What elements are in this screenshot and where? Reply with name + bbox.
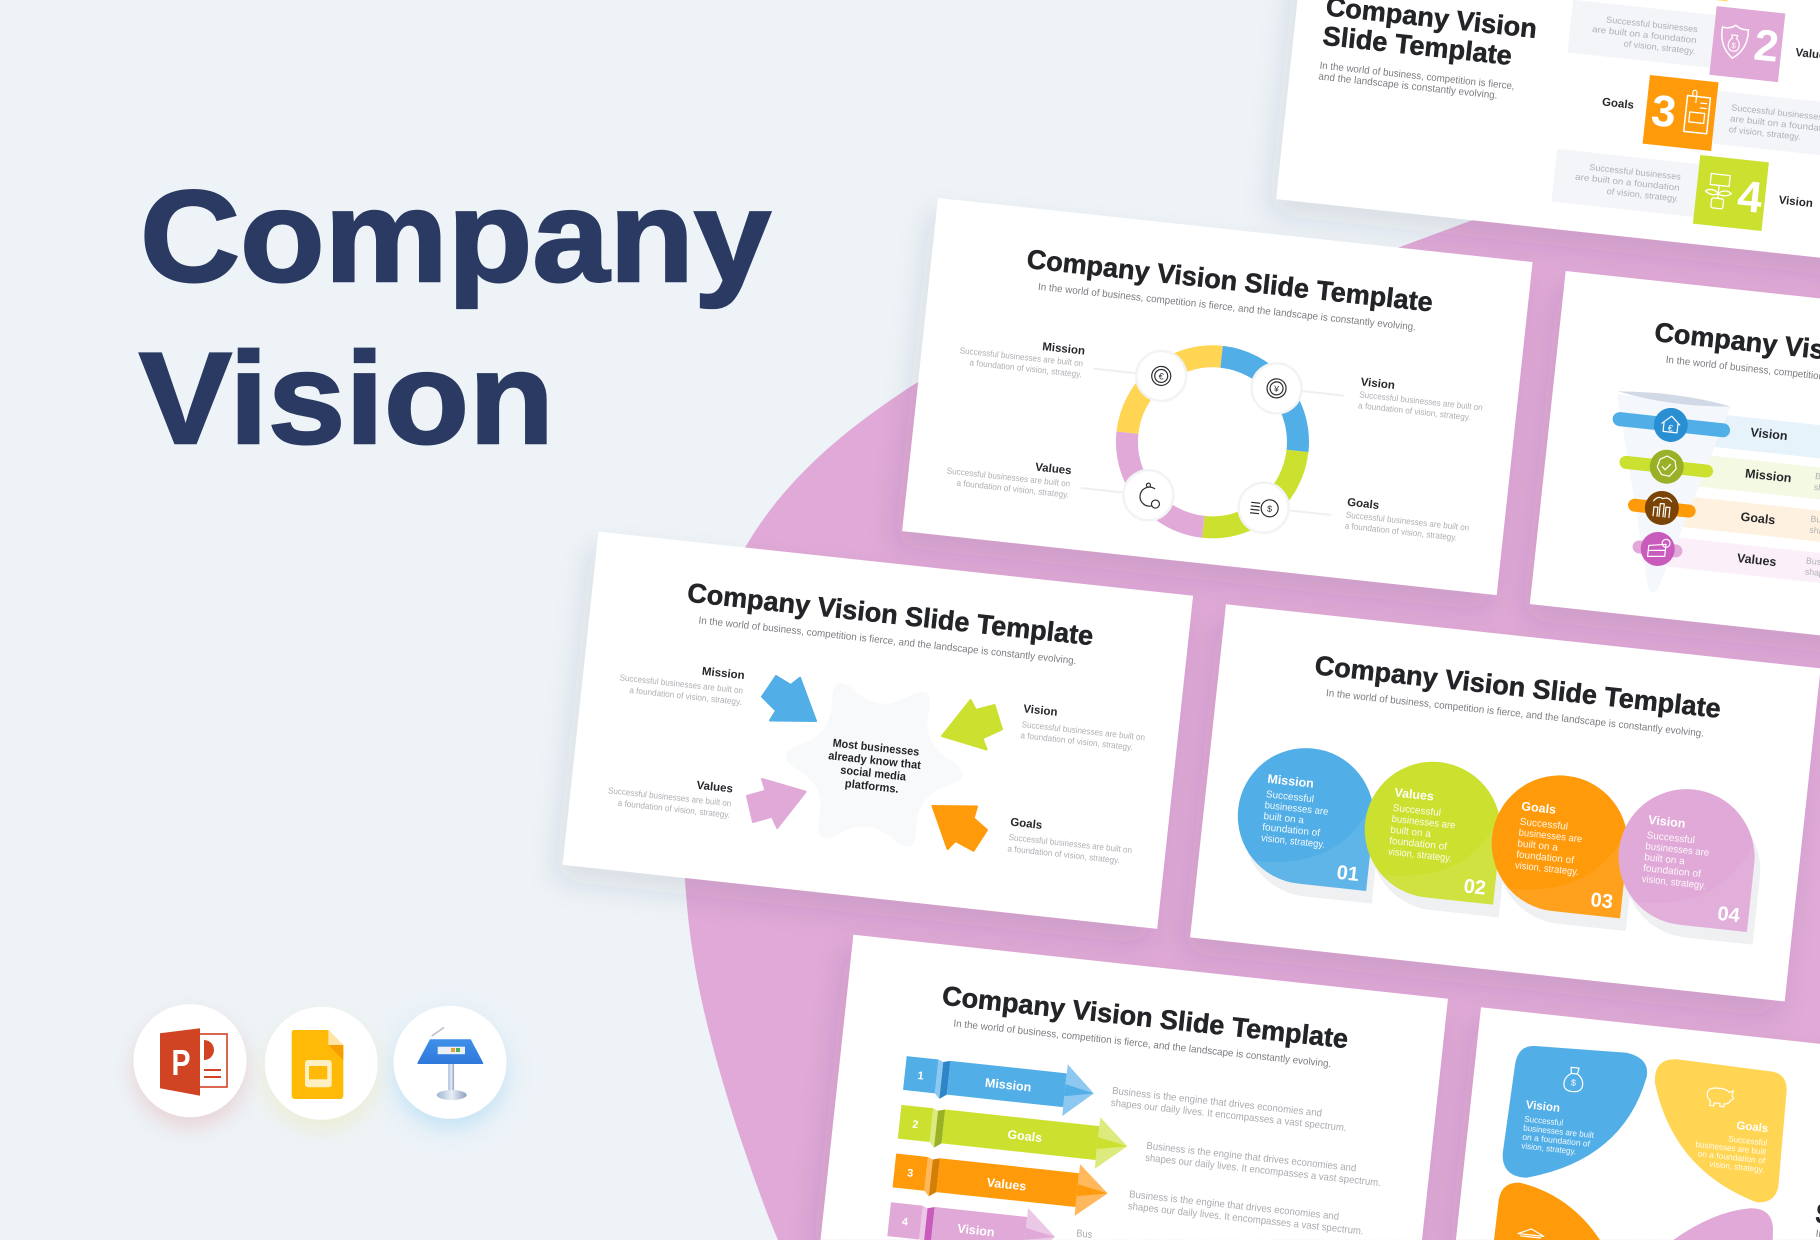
icon: temple xyxy=(1518,1228,1544,1238)
row 2: values: 2 xyxy=(1752,21,1781,72)
icon node: yen xyxy=(1249,361,1304,416)
label: goals xyxy=(1007,817,1134,867)
label: values xyxy=(606,770,734,820)
label: mission: a foundation of vision, strategy. xyxy=(969,357,1082,379)
band: goals xyxy=(1626,487,1697,529)
drop 01 mission: foundation of xyxy=(1262,822,1321,839)
label: mission: Successful businesses are built on xyxy=(959,345,1084,368)
icon node: yen: ¥ xyxy=(1272,384,1281,394)
drop 03 goals: vision, strategy. xyxy=(1514,860,1579,878)
arrow 3 values: Values xyxy=(986,1175,1027,1194)
icon node: euro: € xyxy=(1158,371,1164,382)
arrow 3 description: Business is the engine that drives economies and xyxy=(1129,1189,1340,1223)
quadrant: orange xyxy=(1494,1183,1600,1240)
label: vision xyxy=(1358,376,1485,423)
arrow 2 description: shapes our daily lives. It encompasses a vast spectrum. xyxy=(1145,1153,1381,1189)
label: goals: Goals xyxy=(1010,817,1043,832)
row 2: values: of vision, strategy. xyxy=(1623,38,1696,56)
title: Company xyxy=(140,163,771,309)
arrow 2 goals: 2 xyxy=(912,1119,919,1131)
label: values: Values xyxy=(1736,551,1777,569)
star text xyxy=(825,737,923,798)
row 4: vision: Vision xyxy=(1778,194,1813,210)
label: mission: Mission xyxy=(1744,466,1792,485)
arrow 4 vision: 4 xyxy=(901,1216,909,1229)
label: mission xyxy=(958,332,1086,379)
label: goals: a foundation of vision, strategy. xyxy=(1344,520,1458,543)
star text: Most businesses xyxy=(832,738,920,759)
arrow 1 description xyxy=(1110,1086,1348,1134)
ring chart xyxy=(1118,348,1307,536)
arrow 2 description: Business is the engine that drives economies and xyxy=(1146,1141,1357,1174)
drop 02 values: Values xyxy=(1394,785,1435,804)
subtitle: In the world of business, competition is fierce, and the landscape is constantly evolving. xyxy=(698,615,1077,667)
heading: Company Vision Slide Template xyxy=(686,578,1095,651)
row 2: values xyxy=(1567,0,1820,88)
drop 03 goals: Goals xyxy=(1521,799,1557,817)
drop 03 goals: built on a xyxy=(1517,838,1559,854)
drop 04 vision: 04 xyxy=(1716,903,1742,927)
label: mission xyxy=(618,657,745,707)
goals text: on a foundation of xyxy=(1697,1148,1766,1166)
band: values xyxy=(1631,529,1684,569)
drop 01 mission: Successful xyxy=(1265,789,1315,805)
row 3: goals: Successful businesses xyxy=(1731,102,1820,122)
vision text: on a foundation of xyxy=(1522,1132,1591,1149)
label: vision: a foundation of vision, strategy. xyxy=(1358,400,1471,422)
heading: Slide Template xyxy=(1321,21,1513,71)
drop 02 values xyxy=(1357,755,1515,917)
drop 04 vision xyxy=(1610,782,1768,945)
icon: money bag xyxy=(1563,1067,1584,1093)
drop 02 values: vision, strategy. xyxy=(1387,847,1452,864)
drop 03 goals: foundation of xyxy=(1516,849,1575,867)
row 2: values: $ xyxy=(1731,41,1737,50)
arrow 1 mission: Mission xyxy=(984,1076,1032,1095)
vision text: Successful xyxy=(1524,1114,1564,1128)
arrow 1 description: shapes our daily lives. It encompasses a vast spectrum. xyxy=(1110,1098,1347,1134)
row 4: vision: are built on a foundation xyxy=(1575,172,1680,193)
goals text xyxy=(1693,1116,1770,1175)
label: values xyxy=(945,452,1072,500)
label: values: Successful businesses are built on xyxy=(946,466,1071,489)
goals text: Successful xyxy=(1728,1134,1768,1148)
heading: Company Vision Slide Template xyxy=(941,981,1350,1054)
heading: Company Vision Slide Template xyxy=(1025,244,1434,318)
drop 02 values: foundation of xyxy=(1389,836,1448,853)
label: mission: Mission xyxy=(701,666,745,682)
slide: ring diagram xyxy=(902,198,1533,595)
ribbons xyxy=(1655,409,1820,616)
drop 01 mission: businesses are xyxy=(1264,800,1329,818)
arrow: pink xyxy=(747,779,806,828)
label: values: Values xyxy=(696,780,733,796)
arrow 3 description: shapes our daily lives. It encompasses a vast spectrum. xyxy=(1127,1201,1364,1238)
drop 01 mission: vision, strategy. xyxy=(1261,833,1325,851)
label: values: a foundation of vision, strategy. xyxy=(956,478,1069,500)
drop 03 goals: 03 xyxy=(1590,889,1614,913)
arrow 2 goals: Goals xyxy=(1007,1127,1043,1145)
label: values: a foundation of vision, strategy. xyxy=(617,798,731,820)
arrow 1 description: Business is the engine that drives economies and xyxy=(1112,1086,1323,1119)
row 4: vision: Successful businesses xyxy=(1589,162,1682,182)
arrow 1 mission xyxy=(902,1047,1097,1119)
drop 04 vision: Vision xyxy=(1648,813,1686,831)
vision text: businesses are built xyxy=(1523,1123,1595,1140)
row 3: goals: Goals xyxy=(1601,96,1634,112)
label: goals xyxy=(1740,506,1820,544)
subtitle: In the world of business, competition is fierce, and the landscape is constantly evolving. xyxy=(953,1018,1332,1070)
label: goals xyxy=(1344,497,1471,544)
drop 04 vision: built on a xyxy=(1644,852,1686,867)
drop 01 mission xyxy=(1230,741,1388,904)
icon: Keynote xyxy=(394,1006,506,1119)
row 4: vision: 4 xyxy=(1735,172,1765,223)
quadrant: pink xyxy=(1673,1208,1773,1240)
label: goals: Goals xyxy=(1740,510,1776,527)
drop 01 mission: 01 xyxy=(1336,862,1360,886)
star text: already know that xyxy=(828,750,922,772)
icon: money bag: $ xyxy=(1570,1077,1576,1088)
row 3: goals: of vision, strategy. xyxy=(1728,124,1801,142)
label: values: Successful businesses are built on xyxy=(608,785,732,808)
icon: Google Slides xyxy=(265,1007,378,1120)
label: goals: Goals xyxy=(1347,497,1380,512)
subtitle: In the world of business, competition is fierce, xyxy=(1319,60,1515,92)
label: vision: a foundation of vision, strategy. xyxy=(1020,730,1133,752)
goals text: vision, strategy. xyxy=(1709,1159,1765,1175)
drop 04 vision: Successful xyxy=(1646,830,1695,846)
pink background circle xyxy=(684,140,1820,1240)
arrow: blue xyxy=(762,676,816,721)
arrow: orange xyxy=(932,806,987,851)
arrow 4 vision: Vision xyxy=(957,1222,995,1239)
connector lines xyxy=(1081,369,1344,515)
slide: top numbered squares xyxy=(1276,0,1820,263)
icon node: coins xyxy=(1236,480,1291,535)
slide: funnel xyxy=(1530,271,1820,668)
drop 04 vision: businesses are xyxy=(1645,841,1710,859)
label: goals: Successful businesses are built on xyxy=(1008,832,1133,855)
arrow 1 mission: 1 xyxy=(917,1070,924,1083)
arrow 2 description xyxy=(1145,1141,1383,1189)
band: vision xyxy=(1611,402,1732,448)
band: vision: € xyxy=(1667,423,1673,433)
arrow 3 description xyxy=(1127,1189,1365,1238)
arrow 3 values xyxy=(892,1145,1110,1219)
label: vision: Successful businesses are built on xyxy=(1021,719,1146,742)
title xyxy=(139,163,771,471)
arrow 3 values: 3 xyxy=(906,1167,914,1180)
icon: piggy bank xyxy=(1706,1087,1735,1108)
band: mission xyxy=(1618,445,1715,489)
star text: platforms. xyxy=(844,778,899,796)
goals text: Goals xyxy=(1736,1120,1769,1135)
funnel xyxy=(1597,389,1731,599)
heading: Company Vision Slide Template xyxy=(1313,650,1722,724)
arrow 4 vision xyxy=(887,1193,1058,1240)
arrow: green xyxy=(942,700,1002,750)
arrow 2 goals xyxy=(897,1096,1130,1172)
slide: 3D arrows xyxy=(821,935,1448,1240)
row 2: values: are built on a foundation xyxy=(1592,24,1697,45)
subtitle: and the landscape is constantly evolving. xyxy=(1318,71,1498,102)
slide: star and arrows xyxy=(563,532,1193,929)
label: vision: Vision xyxy=(1360,376,1395,392)
heading xyxy=(1321,0,1538,73)
label: vision: Successful businesses are built on xyxy=(1359,389,1483,413)
subtitle: In the world of business, competition is fierce, and the landscape is constantly evolving. xyxy=(1037,282,1416,333)
title: Vision xyxy=(139,325,554,471)
icon: PowerPoint: P xyxy=(172,1042,190,1083)
icon node: coins: $ xyxy=(1267,504,1273,514)
label: goals: a foundation of vision, strategy. xyxy=(1007,843,1120,865)
label: vision xyxy=(1020,703,1147,753)
label: mission: Mission xyxy=(1042,341,1086,358)
label: mission: Successful businesses are built on xyxy=(619,672,744,696)
star text: social media xyxy=(840,765,907,784)
app icons row xyxy=(134,1004,506,1120)
drop 04 vision: vision, strategy. xyxy=(1641,874,1706,892)
drop 01 mission: built on a xyxy=(1263,811,1305,826)
label: goals: Successful businesses are built on xyxy=(1345,510,1470,533)
drop 03 goals: businesses are xyxy=(1518,827,1583,845)
label: mission: a foundation of vision, strategy. xyxy=(629,685,742,707)
icon: PowerPoint xyxy=(134,1004,246,1117)
drop 02 values: 02 xyxy=(1463,875,1487,900)
label: values: Values xyxy=(1035,462,1072,477)
goals text: businesses are built xyxy=(1695,1139,1767,1157)
vision text: vision, strategy. xyxy=(1521,1140,1577,1156)
icon node: cycle xyxy=(1121,468,1176,523)
vision text xyxy=(1521,1099,1598,1158)
row 3: goals xyxy=(1598,70,1820,167)
slide: numbered drops xyxy=(1190,604,1820,1001)
star shape xyxy=(777,678,971,852)
row 4: vision: of vision, strategy. xyxy=(1606,186,1679,204)
drop 03 goals: Successful xyxy=(1519,817,1568,833)
row 2: values: Successful businesses xyxy=(1606,14,1699,34)
subtitle: In the world of business, competition is fierce, and the landscape is constantly evolving. xyxy=(1325,688,1704,740)
drop 01 mission: Mission xyxy=(1267,772,1315,791)
label: values xyxy=(1736,548,1820,586)
slide: organic quadrants xyxy=(1456,1007,1820,1240)
row 3: goals: 3 xyxy=(1649,86,1679,137)
vision text: Vision xyxy=(1525,1099,1561,1115)
drop 03 goals xyxy=(1484,769,1642,931)
row 4: vision xyxy=(1551,140,1817,236)
drop 02 values: built on a xyxy=(1390,825,1432,840)
label: vision: Vision xyxy=(1750,425,1788,443)
label: vision: Vision xyxy=(1023,703,1058,719)
icon node: euro xyxy=(1134,348,1189,403)
drop 02 values: businesses are xyxy=(1391,814,1456,832)
drop 02 values: Successful xyxy=(1392,803,1441,819)
quadrant: blue xyxy=(1503,1046,1647,1178)
label: mission xyxy=(1744,463,1820,501)
quadrant: yellow xyxy=(1655,1059,1787,1202)
drop 04 vision: foundation of xyxy=(1643,863,1702,880)
row 1 square xyxy=(1659,0,1735,1)
